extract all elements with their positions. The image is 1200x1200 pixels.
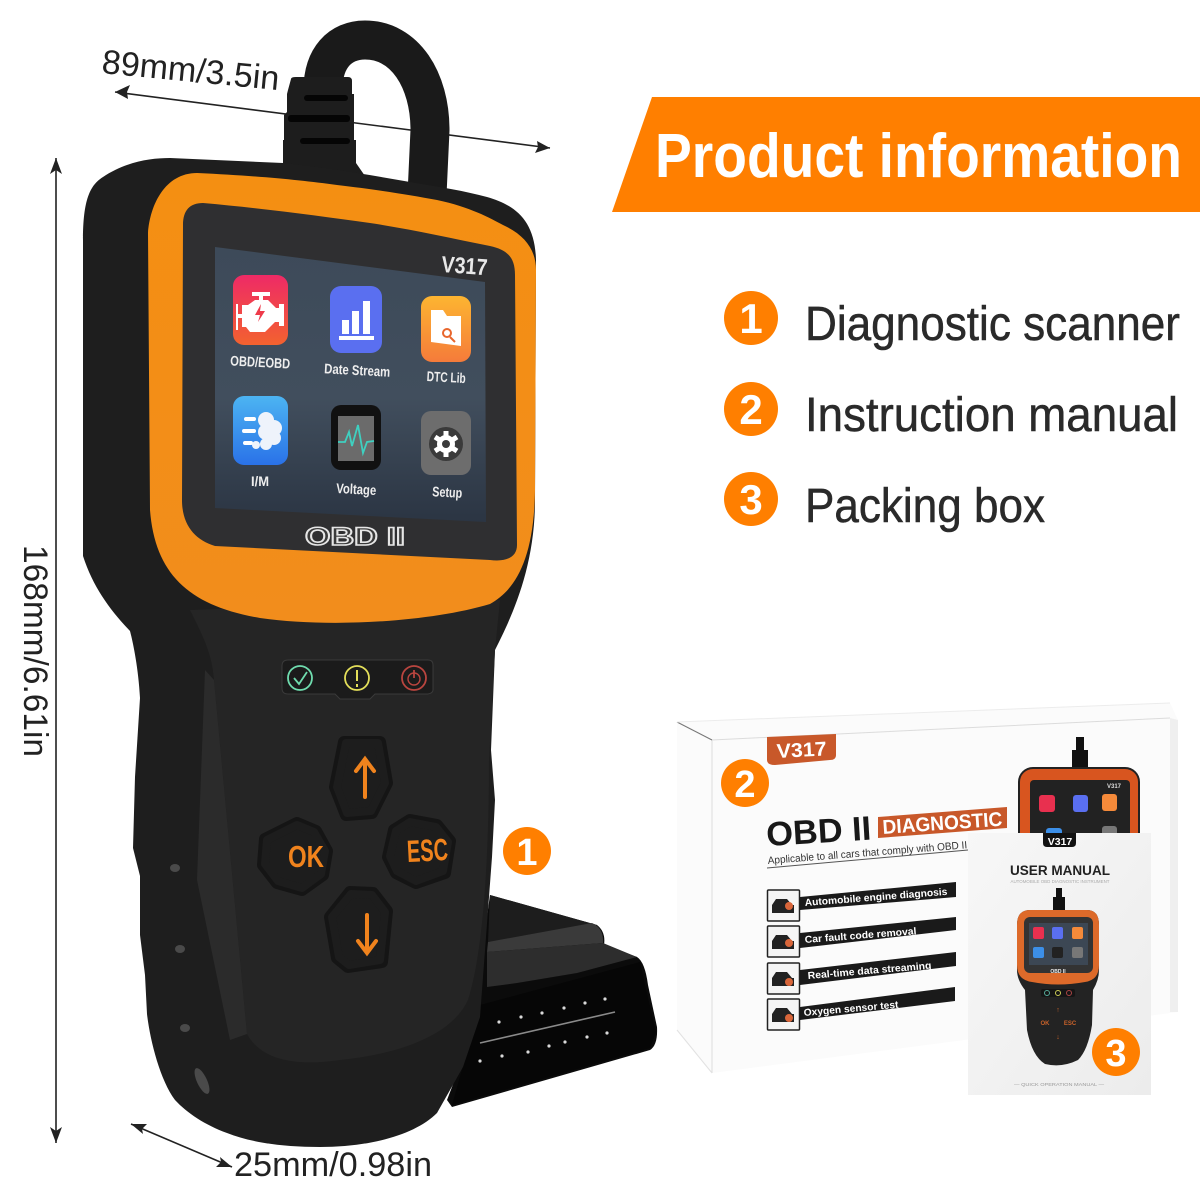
icon: Date Stream — [324, 286, 391, 380]
V317 tab: V317 — [776, 738, 827, 763]
dimension: width — [100, 43, 550, 153]
manual device: OK — [1040, 1021, 1050, 1027]
OK button: OK — [288, 839, 324, 874]
OK button — [263, 823, 327, 890]
icon: DTC Lib: DTC Lib — [426, 368, 466, 386]
dimension: width: 89mm/3.5in — [100, 43, 281, 98]
screen frame — [182, 203, 517, 560]
up button — [335, 742, 387, 815]
manual device: ESC — [1064, 1021, 1077, 1027]
item 3: packing box: Packing box — [805, 480, 1045, 533]
feature: data streaming — [768, 952, 956, 994]
packing box — [677, 703, 1178, 1073]
manual device: ↑ — [1056, 1007, 1060, 1014]
V317 tab — [767, 734, 836, 765]
manual page — [968, 833, 1151, 1095]
icon: OBD/EOBD — [230, 275, 291, 372]
item 2: instruction manual: Instruction manual — [805, 389, 1178, 442]
icon: Setup — [421, 411, 471, 501]
badge 1 — [503, 827, 551, 875]
item 1: diagnostic scanner — [724, 291, 1180, 351]
badge 3: 3 — [1105, 1033, 1127, 1075]
badge 3 — [1092, 1028, 1140, 1076]
dimension: depth: 25mm/0.98in — [234, 1146, 432, 1184]
item 2: instruction manual: 2 — [739, 386, 763, 433]
dimension: height — [16, 158, 62, 1143]
cable and strain relief — [283, 40, 430, 195]
orange bezel — [148, 173, 536, 623]
badge 1: 1 — [516, 832, 538, 874]
manual V317 tab: V317 — [1048, 836, 1072, 848]
icon: I/M: I/M — [251, 473, 269, 489]
user manual — [968, 833, 1151, 1095]
ESC button: ESC — [406, 832, 449, 869]
item 3: packing box — [724, 472, 1045, 533]
manual title: USER MANUAL — [1010, 863, 1110, 878]
box title: OBD II — [765, 810, 872, 854]
icon: Voltage: Voltage — [336, 480, 377, 498]
icon: Setup: Setup — [432, 483, 463, 501]
grip strip — [197, 670, 247, 1040]
device body — [83, 158, 536, 1147]
feature: data streaming: Real-time data streaming — [807, 961, 932, 982]
feature: oxygen sensor — [768, 987, 955, 1030]
icon: I/M — [233, 396, 288, 489]
box device thumbnail: V317 — [1107, 784, 1122, 790]
model label V317: V317 — [441, 251, 488, 280]
feature: fault code removal: Car fault code removal — [804, 926, 917, 946]
icon: Voltage — [331, 405, 381, 498]
contents list — [724, 291, 1180, 533]
box shell — [677, 703, 1178, 1073]
dimension: height: 168mm/6.61in — [16, 545, 54, 757]
item 3: packing box: 3 — [739, 476, 763, 523]
item 1: diagnostic scanner: 1 — [739, 295, 763, 342]
manual subtitle: AUTOMOBILE OBD DIAGNOSTIC INSTRUMENT — [1010, 879, 1110, 884]
box device thumbnail — [1019, 737, 1139, 858]
badge 2 — [721, 759, 769, 807]
down button — [330, 892, 387, 967]
product information banner — [612, 97, 1200, 212]
box title: DIAGNOSTIC — [882, 809, 1003, 839]
applicability line: Applicable to all cars that comply with OBD II — [767, 839, 968, 867]
icon: Date Stream: Date Stream — [324, 360, 391, 380]
connector plug — [447, 895, 657, 1107]
manual V317 tab — [1043, 833, 1076, 848]
icon: DTC Lib — [421, 296, 471, 386]
OBD II logo: OBD II — [305, 523, 405, 551]
feature: engine diagnosis — [768, 882, 956, 921]
feature: engine diagnosis: Automobile engine diagnosis — [804, 887, 948, 909]
feature: oxygen sensor: Oxygen sensor test — [803, 1000, 900, 1019]
badge 2: 2 — [734, 764, 756, 806]
manual device: ↓ — [1056, 1034, 1060, 1041]
scanner device — [83, 158, 536, 1147]
manual device: OBD II — [1050, 969, 1066, 975]
manual footer: — QUICK OPERATION MANUAL — — [1014, 1082, 1105, 1087]
manual device — [1017, 888, 1099, 1065]
front panel — [190, 600, 500, 1062]
ESC button — [388, 820, 450, 883]
feature: fault code removal — [768, 917, 956, 957]
box title — [765, 807, 1007, 854]
status LEDs panel — [282, 660, 433, 699]
dimension: depth — [131, 1124, 432, 1184]
icon: OBD/EOBD: OBD/EOBD — [230, 352, 291, 372]
item 2: instruction manual — [724, 382, 1178, 442]
display — [215, 247, 486, 522]
grip bumps — [170, 864, 212, 1096]
